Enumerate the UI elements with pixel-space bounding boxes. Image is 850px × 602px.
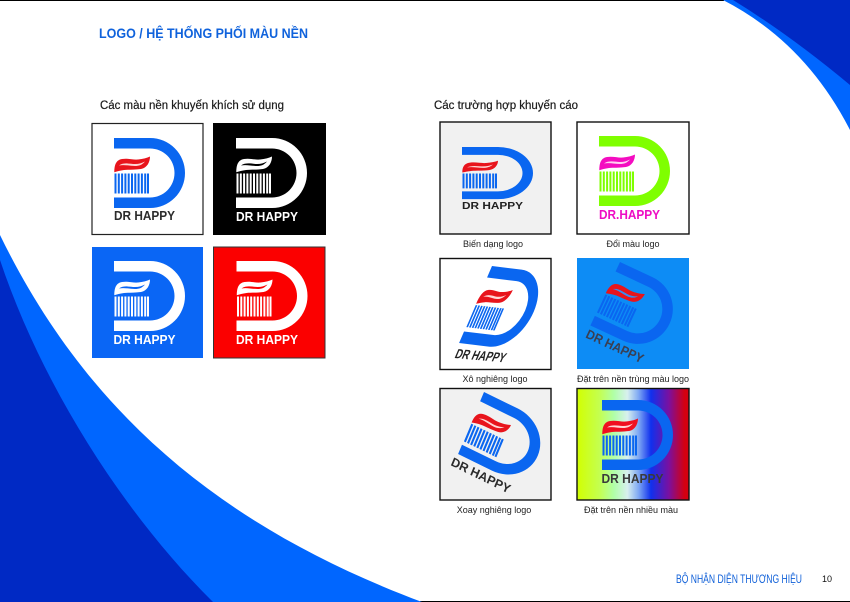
panel: recoloured logo — [577, 122, 689, 249]
panel: logo on white — [92, 124, 203, 234]
heading: warning cases: Các trường hợp khuyến cáo — [434, 100, 578, 112]
panel: distorted logo: DR HAPPY — [462, 200, 523, 212]
panel: distorted logo — [440, 122, 551, 249]
panel: skewed logo — [440, 258, 551, 384]
page number: 10 — [822, 574, 832, 584]
caption: same-colour background: Đặt trên nền trùng màu logo — [577, 374, 689, 384]
caption: skewed logo: Xô nghiêng logo — [462, 374, 528, 384]
panel: rotated logo — [440, 388, 551, 515]
panel: recoloured logo: DR.HAPPY — [599, 207, 660, 222]
caption: recoloured logo: Đổi màu logo — [606, 239, 660, 249]
panel: logo on blue: DR HAPPY — [114, 332, 176, 347]
panel: logo on white: DR HAPPY — [114, 208, 175, 223]
caption: rotated logo: Xoay nghiêng logo — [457, 505, 531, 515]
panel: rotated logo: DR HAPPY — [449, 454, 513, 496]
panel: logo on same-colour background — [577, 258, 689, 384]
caption: distorted logo: Biến dạng logo — [463, 239, 523, 249]
panel: logo on black — [213, 123, 326, 235]
title: LOGO / HỆ THỐNG PHỐI MÀU NỀN — [99, 26, 308, 41]
panel: logo on multicolour background: DR HAPPY — [602, 471, 664, 486]
panel: logo on multicolour background — [577, 388, 689, 515]
caption: multicolour background: Đặt trên nền nhiều màu — [584, 505, 678, 515]
panel: logo on red — [214, 247, 325, 358]
top border line — [0, 0, 724, 1]
panel: logo on blue — [92, 247, 203, 358]
panel: logo on red: DR HAPPY — [236, 332, 298, 347]
corner wave: bottom left — [0, 235, 422, 602]
bottom border line — [420, 601, 850, 602]
panel: logo on same-colour background: DR HAPPY — [584, 326, 646, 366]
corner wave: top right — [723, 0, 850, 130]
heading: recommended backgrounds: Các màu nền khuyến khích sử dụng — [100, 100, 284, 112]
panel: logo on black: DR HAPPY — [236, 209, 298, 224]
footer brand label: BỘ NHẬN DIỆN THƯƠNG HIỆU — [676, 571, 802, 586]
panel: skewed logo: DR HAPPY — [453, 346, 510, 365]
